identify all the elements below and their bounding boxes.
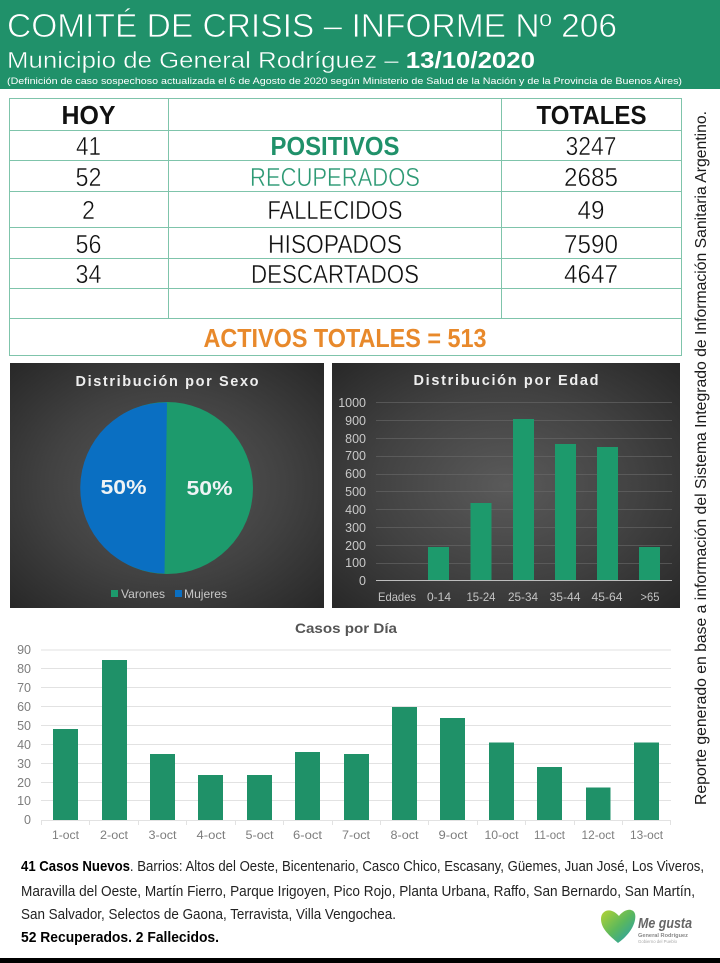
day y axis: 50 (17, 719, 31, 733)
day x axis: 13-oct (630, 828, 664, 842)
age y axis: 0 (359, 574, 366, 588)
logo: Me gusta General Rodríguez: General Rodríguez (638, 933, 688, 939)
day bars (53, 660, 659, 820)
age y axis: 400 (345, 503, 366, 517)
row: descartados: DESCARTADOS (251, 259, 419, 289)
age x axis: 35-44 (550, 590, 581, 604)
day y axis: 80 (17, 662, 31, 676)
chart title: Casos por Día (295, 620, 397, 636)
day x axis: 6-oct (293, 828, 323, 842)
logo: Me gusta General Rodríguez (601, 910, 692, 944)
row: hisopados: 7590 (564, 229, 618, 259)
panel title: Distribución por Sexo (76, 374, 259, 390)
day y axis: 20 (17, 776, 31, 790)
row: recuperados: 52 (76, 162, 102, 192)
age x axis: 0-14 (427, 590, 451, 604)
table header (62, 100, 646, 130)
age y axis (338, 396, 366, 588)
day y axis (17, 643, 31, 827)
row: positivos: POSITIVOS (270, 131, 400, 161)
day x axis: 9-oct (438, 828, 468, 842)
row: hisopados: HISOPADOS (268, 229, 402, 259)
summary table (10, 98, 682, 356)
row: recuperados: RECUPERADOS (250, 162, 420, 192)
panel: distribution by sex (10, 363, 324, 608)
age y axis: 200 (345, 539, 366, 553)
subtitle: Municipio de General Rodríguez – 13/10/2020 (7, 47, 535, 73)
pie labels: 50% (100, 477, 147, 499)
active totals: ACTIVOS TOTALES = 513 (204, 323, 486, 353)
row: descartados: 4647 (564, 259, 618, 289)
age x axis: >65 (640, 590, 660, 604)
age x axis: 15-24 (466, 590, 496, 604)
pie chart: 50% (186, 478, 233, 500)
case definition note: (Definición de caso sospechoso actualizada el 6 de Agosto de 2020 según Ministerio de Salud de la Nación y de la Provincia de Buenos Aires) (7, 76, 682, 87)
row: fallecidos: 2 (82, 195, 95, 225)
day x axis: 4-oct (196, 828, 226, 842)
logo: Me gusta General Rodríguez: Me gusta (638, 915, 692, 932)
day y axis: 0 (24, 813, 31, 827)
row: fallecidos (82, 195, 604, 225)
row: hisopados: 56 (76, 229, 102, 259)
row: descartados: 34 (76, 259, 102, 289)
neighbourhood notes: San Salvador, Selectos de Gaona, Terravista, Villa Vengochea. (21, 906, 396, 923)
row: fallecidos: FALLECIDOS (268, 195, 402, 225)
day y axis: 10 (17, 794, 31, 808)
logo: Me gusta General Rodríguez: Gobierno del Pueblo (638, 939, 677, 944)
age x axis: Edades (378, 590, 416, 604)
day x axis: 7-oct (342, 828, 371, 842)
row: positivos: 41 (76, 131, 101, 161)
neighbourhood notes (21, 858, 704, 946)
age y axis: 300 (345, 521, 366, 535)
day x axis: 11-oct (534, 828, 566, 842)
age y axis: 600 (345, 467, 366, 481)
day x axis: 10-oct (484, 828, 519, 842)
age y axis: 100 (345, 556, 366, 570)
vertical source note: Reporte generado en base a información del Sistema Integrado de Información Sanitaria Argentino. (693, 111, 710, 805)
title: COMITÉ DE CRISIS – INFORME Nº 206 (7, 7, 617, 44)
day x axis: 2-oct (100, 828, 129, 842)
day x axis: 12-oct (582, 828, 615, 842)
row: positivos (76, 131, 616, 161)
age y axis: 700 (345, 449, 366, 463)
day x axis: 3-oct (148, 828, 177, 842)
day y axis: 30 (17, 757, 31, 771)
row: fallecidos: 49 (578, 195, 604, 225)
panel: distribution by age (332, 363, 680, 608)
pie legend: Mujeres (184, 587, 227, 601)
icon: heart (601, 910, 635, 943)
panel title: Distribución por Edad (414, 373, 598, 389)
header banner (0, 0, 720, 89)
row: recuperados: 2685 (564, 162, 618, 192)
row: hisopados (76, 229, 618, 259)
pie legend: Varones (121, 587, 165, 601)
day x axis: 5-oct (246, 828, 274, 842)
pie chart (80, 402, 253, 574)
day x axis: 8-oct (390, 828, 419, 842)
day y axis: 40 (17, 738, 31, 752)
day y axis: 60 (17, 700, 31, 714)
pie legend (111, 587, 227, 601)
age x axis: 25-34 (508, 590, 538, 604)
table header: HOY (62, 100, 116, 130)
day x axis (52, 828, 664, 842)
row: descartados (76, 259, 618, 289)
chart: cases per day (17, 620, 671, 842)
row: recuperados (76, 162, 618, 192)
age y axis: 1000 (338, 396, 366, 410)
day y axis: 90 (17, 643, 31, 657)
day y axis: 70 (17, 681, 31, 695)
row: positivos: 3247 (566, 131, 616, 161)
age y axis: 500 (345, 485, 366, 499)
age y axis: 900 (345, 414, 366, 428)
neighbourhood notes: 52 Recuperados. 2 Fallecidos. (21, 929, 219, 946)
day x axis: 1-oct (52, 828, 80, 842)
age x axis: 45-64 (592, 590, 623, 604)
table header: TOTALES (536, 100, 646, 130)
age x axis (378, 590, 660, 604)
age bars (428, 419, 660, 580)
age y axis: 800 (345, 432, 366, 446)
